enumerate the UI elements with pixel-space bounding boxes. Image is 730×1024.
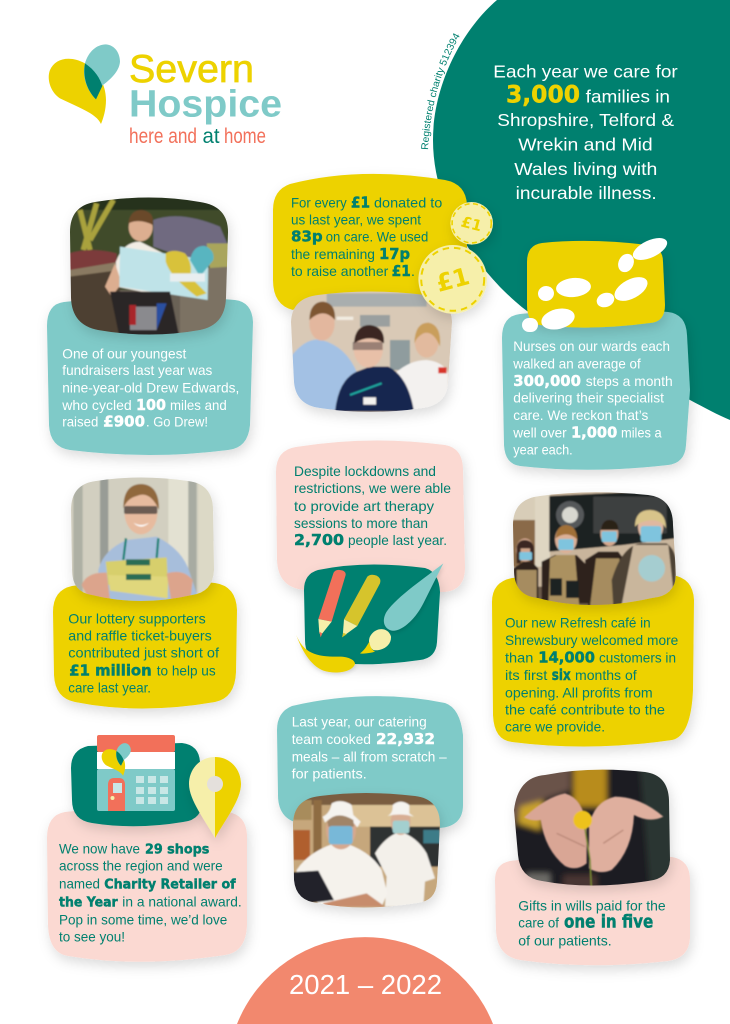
text: care of <box>518 915 559 931</box>
text <box>59 840 242 945</box>
text: £900 <box>103 413 145 431</box>
text <box>294 463 451 549</box>
text: to see you! <box>59 929 125 945</box>
text: 2,700 <box>294 531 344 549</box>
text: donated to <box>374 194 443 210</box>
intro statement: incurable illness. <box>516 183 657 203</box>
card <box>502 309 690 470</box>
text: Charity Retailer of <box>104 876 236 892</box>
text: For every <box>291 194 347 210</box>
text <box>518 898 666 949</box>
text: the Year <box>59 895 118 911</box>
icon: large pound coin: £1 <box>433 262 473 298</box>
panel: Refresh cafe <box>492 490 694 747</box>
text: 300,000 <box>513 372 581 390</box>
text <box>292 714 447 781</box>
logo <box>49 44 282 148</box>
text <box>61 345 239 431</box>
photo: boy with cheque and bike <box>67 193 233 340</box>
text: people last year. <box>348 532 447 548</box>
text: Despite lockdowns and <box>294 463 436 479</box>
icon: footprints <box>522 233 670 333</box>
text: nine-year-old Drew Edwards, <box>62 379 239 395</box>
intro statement: Shropshire, Telford & <box>497 110 674 130</box>
text: meals – all from scratch – <box>292 749 447 765</box>
teal panel <box>71 743 203 826</box>
intro statement: Wales living with <box>514 159 657 179</box>
text <box>512 338 673 457</box>
panel: young fundraiser <box>47 193 253 455</box>
text: 17p <box>379 245 410 263</box>
icon: shop building <box>97 735 175 811</box>
text: six <box>552 666 571 684</box>
text: miles and <box>170 397 227 413</box>
card <box>47 807 247 962</box>
text: . <box>411 263 415 279</box>
card <box>495 854 690 965</box>
text: care last year. <box>68 679 151 695</box>
text: to help us <box>157 662 216 678</box>
card <box>492 573 694 747</box>
text: . Go Drew! <box>146 414 208 430</box>
text: care we provide. <box>505 719 605 735</box>
text: 83p <box>291 228 323 246</box>
icon: art materials <box>296 563 443 672</box>
text: 14,000 <box>538 648 595 666</box>
intro statement <box>493 61 678 203</box>
text: customers in <box>599 649 676 665</box>
text: £1 <box>351 193 370 211</box>
text: of our patients. <box>518 933 612 949</box>
text: sessions to more than <box>294 515 428 531</box>
teal corner shape <box>433 0 730 420</box>
text: opening. All profits from <box>505 684 653 700</box>
photo: three nurses <box>287 290 457 417</box>
text: miles a <box>621 424 662 440</box>
logo: home <box>224 125 266 148</box>
text: fundraisers last year was <box>62 362 212 378</box>
logo heart icon <box>49 44 120 124</box>
text: One of our youngest <box>62 345 186 361</box>
text: its first <box>505 667 547 683</box>
text <box>291 193 443 280</box>
card <box>47 296 253 455</box>
text <box>68 610 219 695</box>
text: who cycled <box>61 397 132 413</box>
text <box>505 615 679 735</box>
text: the café contribute to the <box>505 701 665 717</box>
text: across the region and were <box>59 858 223 874</box>
text: steps a month <box>586 373 673 389</box>
intro statement: Wrekin and Mid <box>518 135 653 155</box>
text: £1 million <box>69 661 152 679</box>
text: Our lottery supporters <box>68 610 206 626</box>
photo: cafe staff <box>510 490 680 610</box>
text: Shrewsbury welcomed more <box>505 632 679 648</box>
photo: nurse with lottery tickets <box>70 473 217 607</box>
icon: map pin <box>189 757 241 838</box>
text: Gifts in wills paid for the <box>518 898 666 914</box>
text: contributed just short of <box>68 645 219 661</box>
text: the remaining <box>291 246 375 262</box>
icon: small pound coin <box>450 202 493 245</box>
logo: here and <box>129 125 197 148</box>
text: and raffle ticket-buyers <box>68 628 212 644</box>
card <box>276 440 465 592</box>
text: to provide art therapy <box>294 498 434 514</box>
text: than <box>505 649 533 665</box>
intro statement: families in <box>586 87 670 107</box>
text: months of <box>575 667 637 683</box>
text: one in five <box>564 912 653 933</box>
text: year each. <box>513 441 573 457</box>
text: £1 <box>392 262 411 280</box>
text: on care. We used <box>326 229 428 245</box>
text: in a national award. <box>122 894 242 910</box>
text: team cooked <box>292 731 371 747</box>
panel: catering <box>277 696 463 910</box>
logo wordmark: Severn <box>129 48 254 91</box>
card <box>53 580 237 708</box>
panel: nurses' steps <box>502 233 690 470</box>
logo: at <box>202 125 220 148</box>
panel: how donations are spent <box>273 174 493 417</box>
text: Nurses on our wards each <box>513 338 670 354</box>
text: 22,932 <box>376 730 435 748</box>
text: restrictions, we were able <box>294 480 451 496</box>
text: Pop in some time, we’d love <box>59 911 227 927</box>
panel: gifts in wills <box>495 760 690 965</box>
intro statement: Each year we care for <box>493 61 678 81</box>
text: raised <box>62 414 98 430</box>
text: We now have <box>59 840 140 856</box>
logo: Hospice <box>129 84 282 126</box>
text: 29 shops <box>145 841 209 857</box>
card <box>277 696 463 828</box>
panel: lottery <box>53 473 237 708</box>
photo: hands holding a flower <box>512 770 676 894</box>
photo: catering team <box>290 790 443 910</box>
registered charity number: Registered charity 512394 <box>421 33 460 150</box>
yellow step panel <box>527 241 665 328</box>
text: for patients. <box>292 765 367 781</box>
card <box>273 174 467 310</box>
text: named <box>59 875 100 891</box>
intro statement: 3,000 <box>506 81 580 109</box>
icon: large pound coin <box>418 245 487 314</box>
year badge: 2021 – 2022 <box>289 969 442 1000</box>
text: Our new Refresh café in <box>505 615 651 631</box>
icon: small pound coin: £1 <box>459 213 484 235</box>
text: Last year, our catering <box>292 714 427 730</box>
text: 100 <box>136 396 166 414</box>
text: walked an average of <box>512 355 641 371</box>
panel: art therapy <box>276 440 465 672</box>
text: to raise another <box>291 263 389 279</box>
text: care. We reckon that’s <box>513 407 648 423</box>
year badge <box>237 937 493 1024</box>
text: 1,000 <box>571 423 617 441</box>
text: well over <box>512 424 567 440</box>
text: us last year, we spent <box>291 211 421 227</box>
text: delivering their specialist <box>513 390 664 406</box>
panel: shops <box>47 735 247 962</box>
